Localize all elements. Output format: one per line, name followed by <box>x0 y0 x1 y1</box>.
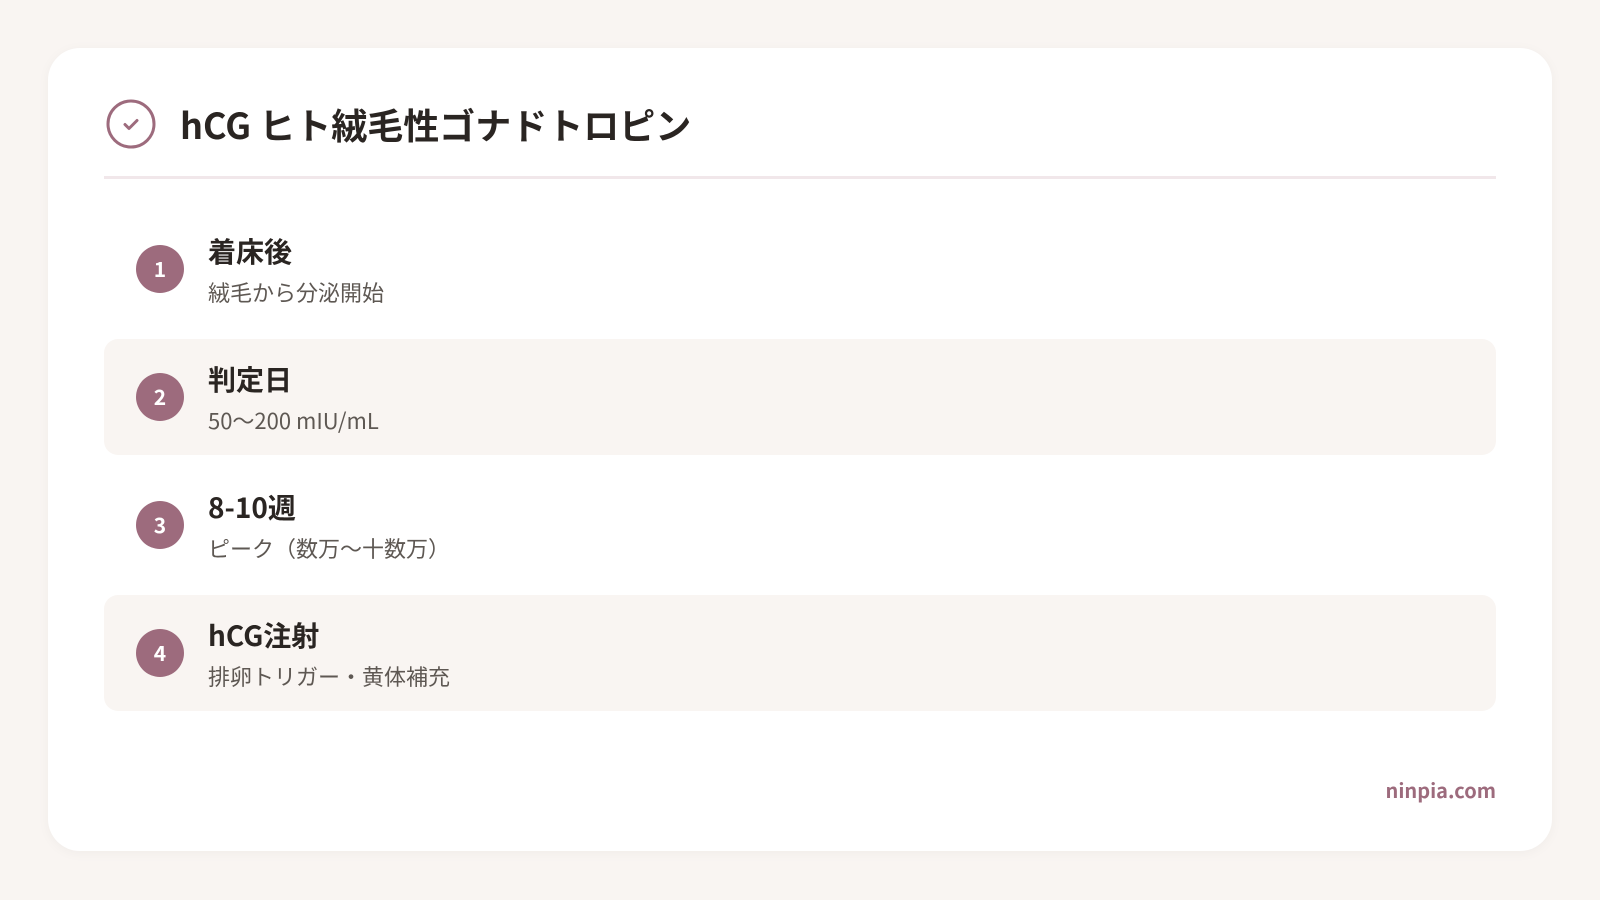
text 3: ピーク（数万〜十数万） <box>208 532 450 564</box>
badge 3: 3 <box>154 510 166 540</box>
heading 2: 判定日 <box>208 359 292 399</box>
badge 1: 1 <box>154 254 166 284</box>
row 2 <box>104 339 1496 455</box>
text 1: 絨毛から分泌開始 <box>208 276 384 308</box>
row 3 <box>136 487 450 564</box>
row 1 <box>136 231 384 308</box>
text 4: 排卵トリガー・黄体補充 <box>208 660 450 692</box>
footer brand: ninpia.com <box>1386 775 1496 804</box>
heading 1: 着床後 <box>208 231 292 271</box>
text 2: 50〜200 mIU/mL <box>208 404 379 436</box>
badge 2 <box>136 373 184 421</box>
badge 3 <box>136 501 184 549</box>
badge 2: 2 <box>154 382 166 412</box>
icon: check circle <box>106 100 156 148</box>
title: hCG ヒト絨毛性ゴナドトロピン <box>180 98 691 150</box>
badge 1 <box>136 245 184 293</box>
heading 3: 8-10週 <box>208 487 296 527</box>
heading 4: hCG注射 <box>208 615 319 655</box>
row 4 <box>104 595 1496 711</box>
badge 4 <box>136 629 184 677</box>
badge 4: 4 <box>154 638 166 668</box>
